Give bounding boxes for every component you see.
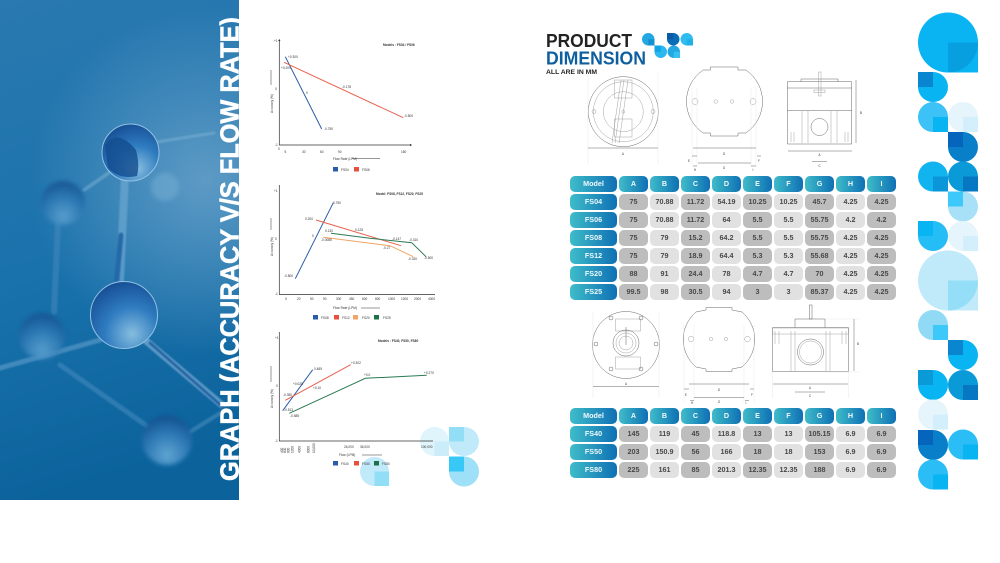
table: dimensions FS04 to FS25: 85.37 [810, 287, 828, 296]
table: dimensions FS40 to FS80: 6.9 [846, 429, 856, 438]
chart labels: Accuracy (%) [270, 389, 274, 408]
image: blurred molecule bonds [0, 133, 224, 435]
chart labels: -0.27 [383, 246, 390, 250]
series: FS50 line [285, 365, 351, 400]
series: FS06 line [284, 62, 403, 118]
panel: blue molecule background [0, 0, 239, 500]
chart labels: +0.300 [288, 55, 298, 59]
diagram: large bottom plate D E F G [683, 308, 755, 405]
table: dimensions FS04 to FS25: 5.5 [752, 215, 762, 224]
chart labels: -0.0085 [321, 238, 332, 242]
table: dimensions FS40 to FS80: G [817, 411, 822, 420]
chart labels: 0 [278, 147, 280, 151]
table: dimensions FS04 to FS25: 79 [660, 233, 668, 242]
table: dimensions FS04 to FS25: 70.88 [656, 215, 674, 224]
chart labels: +0.0 [364, 373, 371, 377]
table: dimensions FS04 to FS25: 4.7 [784, 269, 794, 278]
chart labels: 8000 [306, 446, 310, 453]
table: dimensions FS04 to FS25: G [817, 179, 822, 188]
legend: FS40 FS50 FS80: FS40 [341, 462, 349, 466]
image: blurred back atoms [19, 173, 192, 465]
diagram: side view A B C: C [818, 164, 821, 168]
chart labels: 800 [375, 297, 381, 301]
table: dimensions FS04 to FS25: 5.3 [752, 251, 762, 260]
heading: product dimension: PRODUCT [546, 31, 632, 51]
table: dimensions FS04 to FS25: 10.25 [780, 197, 798, 206]
chart: FS08 FS12 FS20 FS25 accuracy [270, 185, 435, 320]
chart labels: 800 [286, 447, 290, 453]
table: dimensions FS04 to FS25: 75 [630, 197, 638, 206]
chart labels: 450 [349, 297, 355, 301]
chart labels: 0.200 [305, 217, 313, 221]
diagram: large top view A: A [625, 382, 628, 386]
legend: FS40 FS50 FS80: FS50 [362, 462, 370, 466]
table: dimensions FS40 to FS80: FS40 [585, 429, 602, 438]
diagram: large side view A B C [772, 305, 860, 398]
chart labels: -0.147 [392, 237, 401, 241]
chart labels: 10,000 [312, 443, 316, 453]
image: front atoms [90, 124, 159, 348]
legend: FS08 FS12 FS20 FS25: FS08 [321, 316, 329, 320]
legend: FS08 FS12 FS20 FS25: FS20 [362, 316, 370, 320]
chart labels: -0.350 [283, 393, 292, 397]
table: dimensions FS40 to FS80: 6.9 [846, 465, 856, 474]
chart labels: 36,000 [360, 445, 370, 449]
table: dimensions FS40 to FS80: 18 [784, 447, 792, 456]
chart labels: -0.500 [424, 256, 433, 260]
diagram: top view A: A [622, 152, 625, 156]
chart labels: +1 [275, 336, 279, 340]
table: dimensions FS04 to FS25: 70.88 [656, 197, 674, 206]
chart labels: 60 [320, 150, 324, 154]
chart labels: 300 [336, 297, 342, 301]
table: dimensions FS40 to FS80: FS50 [585, 447, 602, 456]
table: dimensions FS04 to FS25: 4.25 [874, 287, 888, 296]
table: dimensions FS40 to FS80: 13 [784, 429, 792, 438]
table: dimensions FS04 to FS25: 4.25 [874, 233, 888, 242]
table: dimensions FS40 to FS80: F [786, 411, 791, 420]
table: dimensions FS04 to FS25: 98 [660, 287, 668, 296]
table: dimensions FS04 to FS25: FS20 [585, 269, 602, 278]
chart: FS40 FS50 FS80 accuracy [270, 332, 434, 466]
chart labels: 600 [362, 297, 368, 301]
table: dimensions FS04 to FS25: 70 [816, 269, 824, 278]
table: dimensions FS40 to FS80: B [662, 411, 667, 420]
table: dimensions FS04 to FS25: 55.75 [810, 215, 828, 224]
diagram: large bottom plate D E F G: D [718, 388, 721, 392]
chart labels: 0.485 [314, 367, 322, 371]
table: dimensions FS04 to FS25: 30.5 [688, 287, 702, 296]
series: FS20 line [323, 237, 413, 257]
diagram: large side view A B C: B [857, 342, 859, 346]
table: dimensions FS04 to FS25: 75 [630, 215, 638, 224]
chart labels: 1000 [388, 297, 395, 301]
table: dimensions FS40 to FS80: FS80 [585, 465, 602, 474]
diagram: top view A [588, 72, 658, 164]
table: dimensions FS40 to FS80: 85 [692, 465, 700, 474]
table: dimensions FS04 to FS25: 4.25 [874, 251, 888, 260]
diagram: bottom plate D E F G: I [753, 168, 754, 172]
table: dimensions FS04 to FS25: H [848, 179, 853, 188]
table: dimensions FS40 to FS80: C [693, 411, 698, 420]
table: dimensions FS40 to FS80: H [848, 411, 853, 420]
chart labels: -0.585 [290, 414, 299, 418]
chart labels: Flow (LPM) [339, 453, 355, 457]
table: dimensions FS04 to FS25: I [880, 179, 882, 188]
table: dimensions FS04 to FS25: 55.75 [810, 233, 828, 242]
chart labels: -0.513 [284, 408, 293, 412]
chart labels: 160 [401, 150, 407, 154]
chart labels: 90 [323, 297, 327, 301]
chart labels: -0.800 [284, 274, 293, 278]
legend: FS40 FS50 FS80 [333, 461, 390, 466]
table: dimensions FS04 to FS25: FS25 [585, 287, 602, 296]
legend: FS40 FS50 FS80: FS80 [382, 462, 390, 466]
table: dimensions FS40 to FS80: 119 [659, 429, 670, 438]
table: dimensions FS40 to FS80: 12.35 [748, 465, 766, 474]
diagram: bottom plate D E F G: G [723, 166, 726, 170]
table: dimensions FS04 to FS25: Model [583, 179, 604, 188]
chart labels: +1 [274, 39, 278, 43]
chart labels [270, 39, 415, 161]
table: dimensions FS04 to FS25: 4.25 [844, 197, 858, 206]
chart labels: 0.130 [325, 229, 333, 233]
chart labels [270, 189, 435, 310]
chart labels: 0 [306, 91, 308, 95]
table: dimensions FS04 to FS25: 4.25 [844, 251, 858, 260]
chart labels: 0.750 [333, 201, 341, 205]
table: dimensions FS04 to FS25: FS04 [585, 197, 602, 206]
chart labels: 0 [275, 237, 277, 241]
chart labels: -1 [275, 439, 278, 443]
table: dimensions FS04 to FS25: 24.4 [688, 269, 702, 278]
table: dimensions FS04 to FS25: 94 [722, 287, 730, 296]
table: dimensions FS04 to FS25: 5.5 [784, 215, 794, 224]
chart labels: +0.028 [293, 382, 303, 386]
chart labels: 1200 [290, 446, 294, 453]
icon: heading teardrops [642, 33, 693, 58]
diagram: side view A B C: A [818, 153, 821, 157]
series: FS04 line [285, 57, 322, 129]
table: dimensions FS40 to FS80: 150.9 [656, 447, 674, 456]
table: dimensions FS04 to FS25: D [724, 179, 729, 188]
diagram: bottom plate D E F G: H [694, 168, 697, 172]
chart labels: 50 [310, 297, 314, 301]
table: dimensions FS04 to FS25: B [662, 179, 667, 188]
table: dimensions FS40 to FS80: 153 [814, 447, 826, 456]
chart labels: 0 [276, 384, 278, 388]
series: FS40 line [283, 370, 313, 411]
diagram: large bottom plate D E F G: G [718, 400, 721, 404]
table: dimensions FS40 to FS80: 6.9 [876, 447, 886, 456]
table: dimensions FS04 to FS25 [570, 176, 896, 300]
heading: product dimension: DIMENSION [546, 48, 646, 68]
table: dimensions FS40 to FS80: 203 [628, 447, 640, 456]
diagram: bottom plate D E F G: F [758, 159, 760, 163]
table: dimensions FS40 to FS80: D [724, 411, 729, 420]
chart labels: -1 [275, 143, 278, 147]
chart labels: Flow Rate (LPM) [333, 306, 357, 310]
legend: FS04 FS06: FS04 [341, 168, 349, 172]
chart labels: -0.310 [409, 238, 418, 242]
diagram: large bottom plate D E F G: I [746, 401, 747, 405]
table: dimensions FS04 to FS25: FS08 [585, 233, 602, 242]
table: dimensions FS40 to FS80: 188 [814, 465, 826, 474]
table: dimensions FS04 to FS25: 4.25 [874, 269, 888, 278]
diagram: large top view A [592, 312, 660, 398]
table: dimensions FS40 to FS80: Model [583, 411, 604, 420]
table: dimensions FS04 to FS25: 3 [756, 287, 760, 296]
table: dimensions FS04 to FS25: FS06 [585, 215, 602, 224]
chart labels: 90 [338, 150, 342, 154]
table: dimensions FS04 to FS25: 5.5 [784, 233, 794, 242]
diagram: side view A B C [787, 72, 862, 168]
diagram: large bottom plate D E F G: E [685, 393, 687, 397]
chart labels: 0.125 [355, 228, 363, 232]
table: dimensions FS04 to FS25: 10.25 [748, 197, 766, 206]
heading: product dimension [546, 31, 646, 76]
chart labels: -0.178 [342, 85, 351, 89]
table: dimensions FS04 to FS25: 11.72 [687, 215, 704, 224]
chart labels: Accuracy (%) [270, 94, 274, 113]
legend: FS08 FS12 FS20 FS25: FS25 [383, 316, 391, 320]
chart labels: -0.500 [404, 114, 413, 118]
table: dimensions FS04 to FS25: 15.2 [688, 233, 702, 242]
table: dimensions FS04 to FS25: F [786, 179, 791, 188]
chart labels: 100,000 [421, 445, 433, 449]
chart labels: 0 [312, 234, 314, 238]
chart labels: +0.302 [351, 361, 361, 365]
table: dimensions FS40 to FS80: 166 [720, 447, 732, 456]
table: dimensions FS40 to FS80: I [880, 411, 882, 420]
chart labels: Model: FS08, FS12, FS20, FS25 [376, 192, 423, 196]
chart labels [270, 336, 434, 457]
table: dimensions FS40 to FS80: 105.15 [808, 429, 830, 438]
table: dimensions FS40 to FS80: 45 [692, 429, 700, 438]
table: dimensions FS40 to FS80: 161 [658, 465, 670, 474]
table: dimensions FS04 to FS25: 4.25 [874, 197, 888, 206]
diagram: large bottom plate D E F G: H [691, 401, 694, 405]
diagram: large side view A B C: A [809, 386, 812, 390]
series: FS25 line [331, 233, 426, 257]
table: dimensions FS04 to FS25: 5.5 [752, 233, 762, 242]
chart labels: 1200 [401, 297, 408, 301]
table: dimensions FS40 to FS80: 56 [692, 447, 700, 456]
table: dimensions FS04 to FS25: E [755, 179, 760, 188]
decoration: right column of teardrops, lower [918, 251, 978, 490]
table: dimensions FS04 to FS25: 88 [630, 269, 638, 278]
heading: vertical graph title: GRAPH (ACCURACY V/S FLOW RATE) [216, 17, 244, 481]
table: dimensions FS40 to FS80: 201.3 [718, 465, 736, 474]
table: dimensions FS40 to FS80: 6.9 [846, 447, 856, 456]
chart labels: 0 [285, 297, 287, 301]
table: dimensions FS40 to FS80: 6.9 [876, 465, 886, 474]
series: FS80 line [289, 375, 427, 413]
chart labels: 20 [297, 297, 301, 301]
chart labels: 0 [275, 87, 277, 91]
table: dimensions FS04 to FS25: 4.7 [752, 269, 762, 278]
table: dimensions FS04 to FS25: 4.2 [876, 215, 886, 224]
table: dimensions FS04 to FS25: 79 [660, 251, 668, 260]
chart labels: +1 [274, 189, 278, 193]
series: FS12 line [316, 220, 401, 246]
table: dimensions FS40 to FS80: A [631, 411, 636, 420]
table: dimensions FS04 to FS25: 4.25 [844, 269, 858, 278]
table: dimensions FS40 to FS80 [570, 408, 896, 478]
chart labels: +0.200 [281, 66, 291, 70]
chart labels: -0.320 [408, 257, 417, 261]
chart labels: Flow Rate (LPM) [333, 157, 357, 161]
diagram: large side view A B C: C [809, 394, 812, 398]
table: dimensions FS40 to FS80: 118.8 [718, 429, 735, 438]
chart labels: 400 [280, 447, 284, 453]
legend: FS08 FS12 FS20 FS25: FS12 [342, 316, 350, 320]
series: FS08 line [295, 203, 333, 279]
chart labels: +0.270 [424, 371, 434, 375]
diagram: bottom plate D E F G: D [723, 152, 726, 156]
table: dimensions FS04 to FS25: 18.9 [688, 251, 702, 260]
chart labels: Models : FS04 / FS06 [383, 43, 415, 47]
diagram: large bottom plate D E F G: F [751, 393, 753, 397]
chart labels: 30 [302, 150, 306, 154]
chart labels: 4000 [298, 446, 302, 453]
chart labels: 26,000 [344, 445, 354, 449]
table: dimensions FS04 to FS25: 3 [786, 287, 790, 296]
table: dimensions FS04 to FS25: 64.4 [720, 251, 734, 260]
table: dimensions FS04 to FS25: 64 [722, 215, 730, 224]
diagram: bottom plate D E F G [686, 67, 763, 172]
chart labels: -0.750 [324, 127, 333, 131]
legend: FS08 FS12 FS20 FS25 [313, 315, 391, 320]
table: dimensions FS04 to FS25: 75 [630, 251, 638, 260]
diagram: side view A B C: B [860, 111, 862, 115]
chart labels: 5 [284, 150, 286, 154]
legend: FS04 FS06: FS06 [362, 168, 370, 172]
legend: FS04 FS06 [333, 167, 370, 172]
table: dimensions FS04 to FS25: 99.5 [626, 287, 640, 296]
table: dimensions FS04 to FS25: 11.72 [687, 197, 704, 206]
diagram: bottom plate D E F G: E [688, 159, 690, 163]
table: dimensions FS04 to FS25: 4.25 [844, 287, 858, 296]
table: dimensions FS40 to FS80: 6.9 [876, 429, 886, 438]
table: dimensions FS04 to FS25: 4.2 [846, 215, 856, 224]
table: dimensions FS04 to FS25: C [693, 179, 698, 188]
table: dimensions FS04 to FS25: 4.25 [844, 233, 858, 242]
table: dimensions FS40 to FS80: 145 [628, 429, 640, 438]
decoration: right column of teardrops, upper [918, 13, 978, 251]
chart labels: 600 [283, 447, 287, 453]
table: dimensions FS04 to FS25: 91 [660, 269, 668, 278]
chart labels: -1 [275, 292, 278, 296]
table: dimensions FS40 to FS80: 12.35 [780, 465, 798, 474]
table: dimensions FS04 to FS25: 5.3 [784, 251, 794, 260]
chart labels: 4000 [428, 297, 435, 301]
chart labels: +0.10 [313, 386, 321, 390]
decoration: teardrop cluster behind chart [360, 427, 479, 486]
table: dimensions FS04 to FS25: 54.19 [718, 197, 736, 206]
table: dimensions FS04 to FS25: 75 [630, 233, 638, 242]
table: dimensions FS04 to FS25: FS12 [585, 251, 602, 260]
table: dimensions FS40 to FS80: 13 [754, 429, 762, 438]
table: dimensions FS04 to FS25: 64.2 [720, 233, 734, 242]
heading: product dimension: ALL ARE IN MM [546, 69, 597, 76]
chart labels: 2000 [414, 297, 421, 301]
table: dimensions FS40 to FS80: 225 [628, 465, 640, 474]
table: dimensions FS04 to FS25: 78 [722, 269, 730, 278]
chart labels: Accuracy (%) [270, 237, 274, 256]
chart: FS04 and FS06 accuracy [270, 39, 415, 172]
table: dimensions FS40 to FS80: E [755, 411, 760, 420]
table: dimensions FS04 to FS25: 45.7 [812, 197, 826, 206]
table: dimensions FS40 to FS80: 18 [754, 447, 762, 456]
table: dimensions FS04 to FS25: 55.68 [810, 251, 828, 260]
chart labels: Models : FS40, FS50, FS80 [378, 339, 418, 343]
table: dimensions FS04 to FS25: A [631, 179, 636, 188]
